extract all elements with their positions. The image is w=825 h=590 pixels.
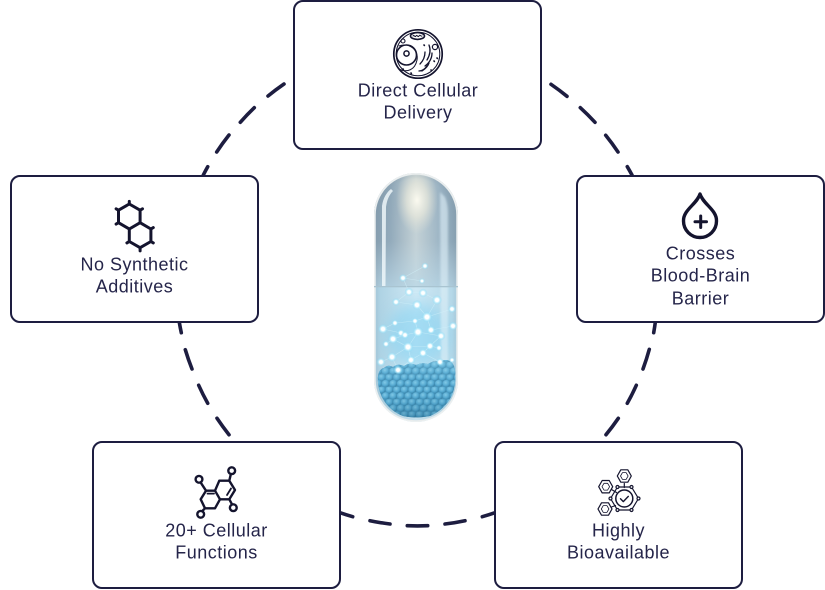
label: Highly bbox=[592, 520, 645, 540]
beads bbox=[378, 360, 456, 418]
network lines bbox=[381, 266, 453, 370]
label: Crosses bbox=[666, 244, 735, 264]
label: Delivery bbox=[383, 102, 453, 122]
icon: drop with plus bbox=[683, 194, 717, 238]
label: Direct Cellular bbox=[358, 80, 478, 100]
label: 20+ Cellular bbox=[165, 520, 268, 540]
panel: 20+ Cellular Functions bbox=[93, 442, 340, 588]
label bbox=[651, 244, 750, 308]
label: No Synthetic bbox=[80, 254, 189, 274]
icon: bioavailable molecule bbox=[598, 470, 640, 515]
label bbox=[358, 80, 478, 122]
dashed circle connecting the boxes bbox=[179, 84, 655, 526]
panel: Direct Cellular Delivery bbox=[294, 1, 541, 149]
glowing particles bbox=[376, 262, 458, 374]
label: Blood-Brain bbox=[651, 266, 750, 286]
label bbox=[165, 520, 268, 562]
capsule shell bbox=[374, 166, 458, 422]
label bbox=[80, 254, 189, 296]
panel: Highly Bioavailable bbox=[495, 442, 742, 588]
panel: Crosses Blood-Brain Barrier bbox=[577, 176, 824, 322]
icon: molecule bbox=[196, 467, 237, 518]
label bbox=[567, 520, 670, 562]
label: Functions bbox=[175, 542, 258, 562]
capsule illustration bbox=[374, 166, 458, 422]
label: Bioavailable bbox=[567, 542, 670, 562]
panel: No Synthetic Additives bbox=[11, 176, 258, 322]
label: Additives bbox=[96, 276, 173, 296]
icon: cell bbox=[394, 30, 442, 78]
icon: hexagons bbox=[116, 201, 153, 251]
label: Barrier bbox=[672, 288, 729, 308]
